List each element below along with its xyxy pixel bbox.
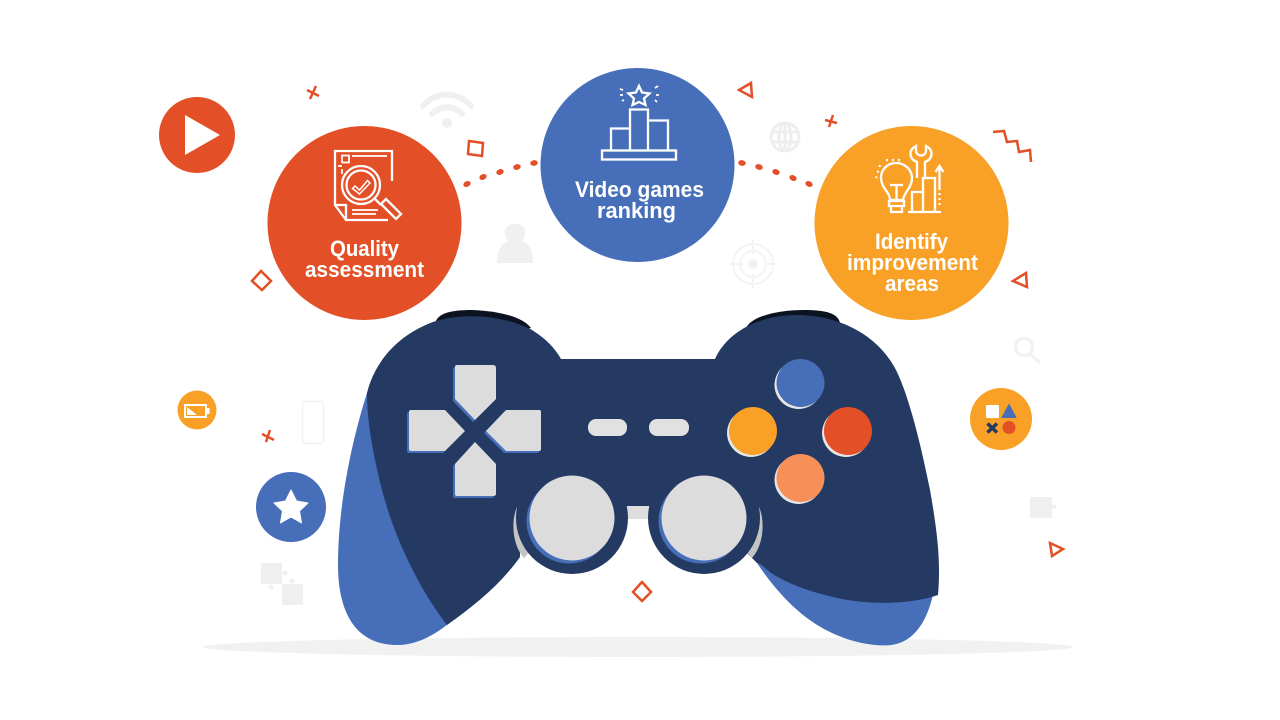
decoration: diamond bottom <box>633 582 651 601</box>
panel: quality assessment <box>268 126 462 320</box>
connector: dotted line right <box>738 160 814 188</box>
connector: dotted line left <box>462 160 538 188</box>
decoration: triangle right <box>1013 273 1027 287</box>
badge: battery <box>178 390 216 430</box>
text: video games ranking: Video games <box>575 177 704 202</box>
badge: play <box>159 97 235 173</box>
game controller <box>338 310 939 645</box>
decoration: triangle lower right <box>1050 543 1063 556</box>
shoulder bumper right <box>746 310 840 340</box>
icon: document with magnifier <box>335 151 401 220</box>
badge: game symbols <box>970 388 1032 450</box>
icon: faint user <box>497 224 533 263</box>
icon: faint search <box>1016 338 1039 362</box>
grip crescents <box>513 507 763 558</box>
center bridge <box>626 505 650 519</box>
icon: faint puzzle left <box>261 563 303 605</box>
select buttons <box>588 419 689 436</box>
body navy <box>367 315 939 625</box>
badge: star <box>256 472 326 542</box>
icon: faint phone <box>302 402 324 444</box>
body navy center <box>520 440 628 506</box>
decoration: diamond left <box>252 271 271 290</box>
d-pad shadow <box>407 367 539 498</box>
stick right <box>648 462 760 574</box>
icon: bulb wrench and chart <box>876 146 944 212</box>
d-pad keys <box>409 365 541 496</box>
panel: identify improvement areas <box>814 126 1008 320</box>
icon: faint target <box>729 240 777 288</box>
decoration: cross top right <box>825 115 837 127</box>
icon: faint globe <box>771 123 799 151</box>
decoration: cross top left <box>307 86 319 99</box>
decoration: square <box>468 141 483 156</box>
panel: identify improvement areas: improvement <box>847 250 979 275</box>
icon: podium with star <box>602 86 676 160</box>
text: identify improvement areas: Identify <box>875 229 949 254</box>
decoration: zigzag <box>993 131 1031 162</box>
ground shadow <box>203 637 1073 657</box>
d-pad <box>407 365 541 498</box>
decoration: triangle top <box>739 83 752 97</box>
panel: quality assessment: assessment <box>305 257 425 282</box>
panel: video games ranking: ranking <box>597 198 676 223</box>
stick left <box>516 462 628 574</box>
body light blue underlay <box>338 393 934 645</box>
panel: identify improvement areas: areas <box>885 271 939 296</box>
decoration: red shapes <box>252 83 1063 601</box>
panel: video games ranking <box>540 68 734 262</box>
decoration: cross lower left <box>262 430 274 442</box>
action buttons <box>727 359 872 504</box>
icon: faint puzzle right <box>1030 497 1056 518</box>
text: quality assessment: Quality <box>330 236 400 261</box>
shoulder bumper left <box>435 310 531 340</box>
icon: faint wifi <box>423 95 471 128</box>
